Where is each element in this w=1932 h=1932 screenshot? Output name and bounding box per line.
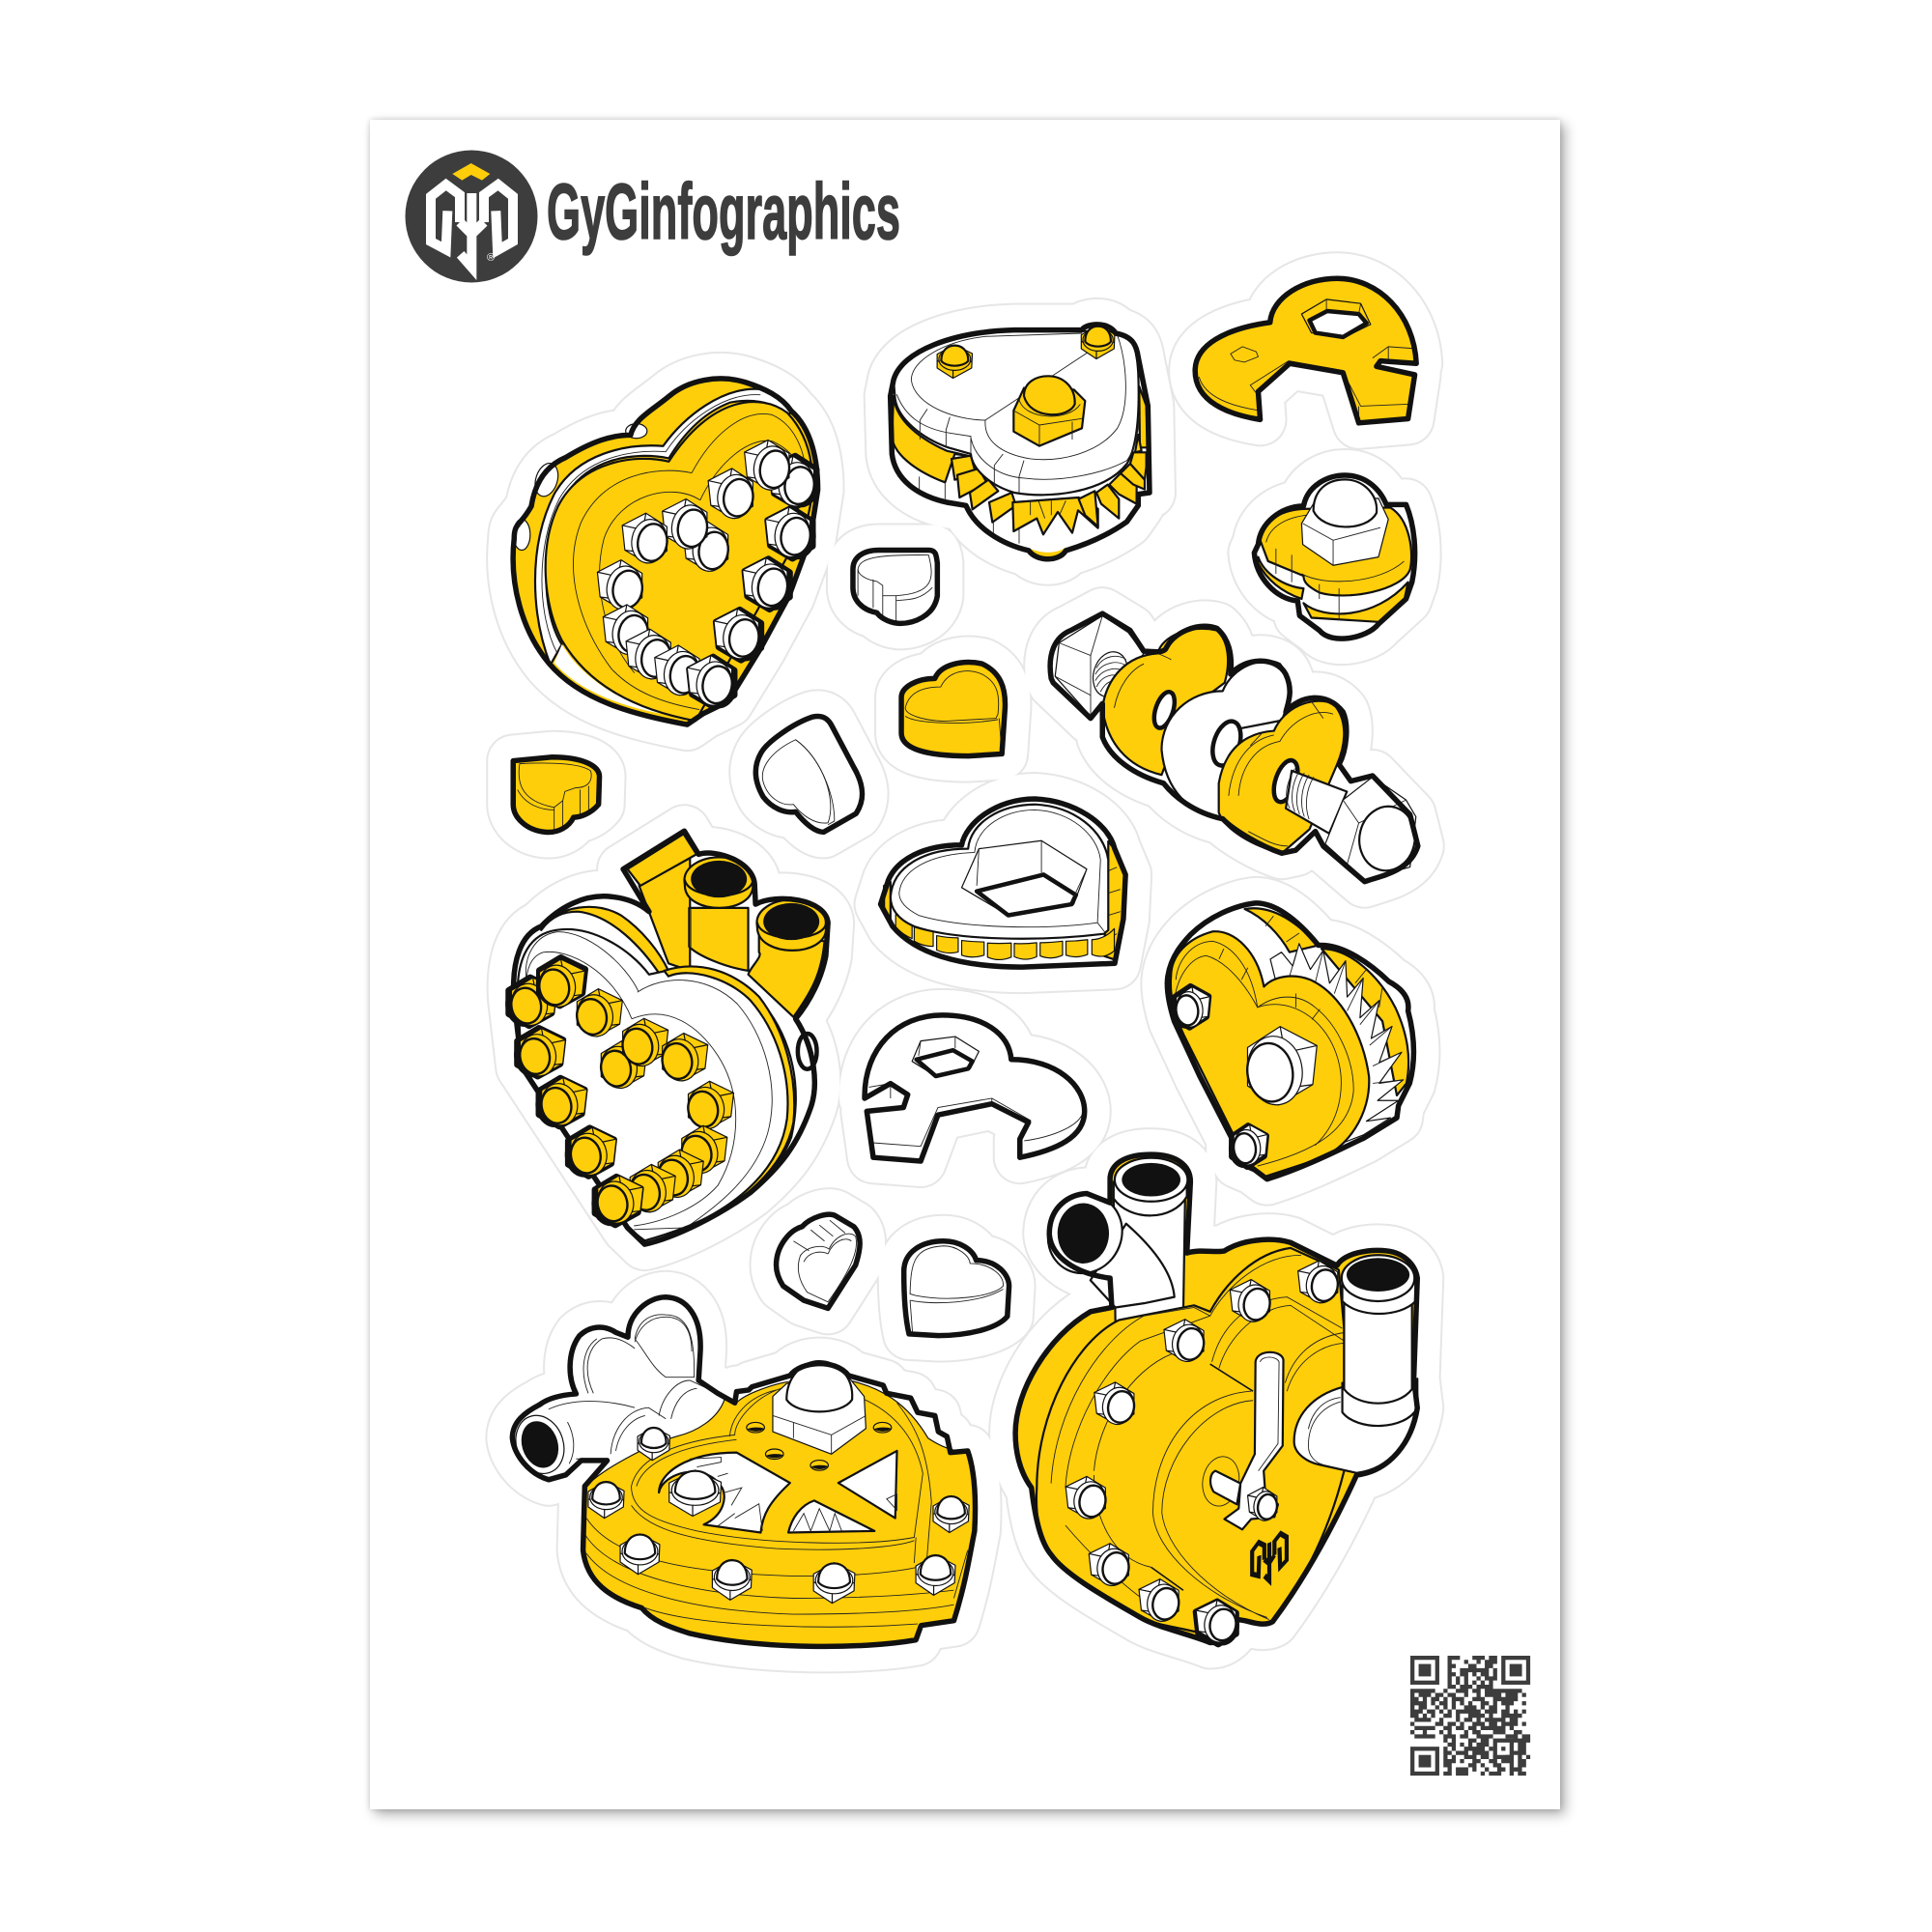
sticker: white heart with yellow gear and bolts — [891, 325, 1150, 559]
sticker: yellow heart side view with pipes and lever — [1015, 1154, 1417, 1645]
sticker: yellow heart with white gear — [1167, 903, 1413, 1179]
sticker: white heart with pipes and yellow bolts — [505, 831, 828, 1244]
sticker: small yellow heart left — [513, 757, 600, 833]
brand logo and wordmark — [406, 151, 900, 282]
QR code — [1410, 1658, 1530, 1774]
sticker: small white heart lower — [904, 1241, 1009, 1336]
paper sheet — [370, 120, 1560, 1809]
sticker: large yellow heart with white bolts — [513, 379, 819, 724]
sticker: small white heart upper — [853, 551, 937, 623]
sticker: exploded bolt with heart plates — [1050, 613, 1422, 882]
small black logo mark — [1252, 1531, 1287, 1587]
sticker die-cut halos — [512, 278, 1418, 1646]
sticker: white heart with hex hole and yellow teeth — [881, 799, 1125, 967]
sticker: small yellow heart centre — [901, 663, 1005, 756]
sticker: yellow wrench — [1195, 278, 1416, 423]
sticker: small heart stack with white nut — [1254, 475, 1415, 639]
sticker: small white heart tilted lower — [777, 1214, 860, 1308]
sticker: white wrench — [865, 1015, 1085, 1161]
sticker: yellow heart with window cover and white pipes — [509, 1297, 976, 1646]
logo badge: ® — [487, 252, 495, 264]
wordmark: GyGinfographics — [547, 168, 900, 256]
sticker: tilted white heart — [755, 716, 863, 832]
logo badge — [406, 151, 537, 282]
